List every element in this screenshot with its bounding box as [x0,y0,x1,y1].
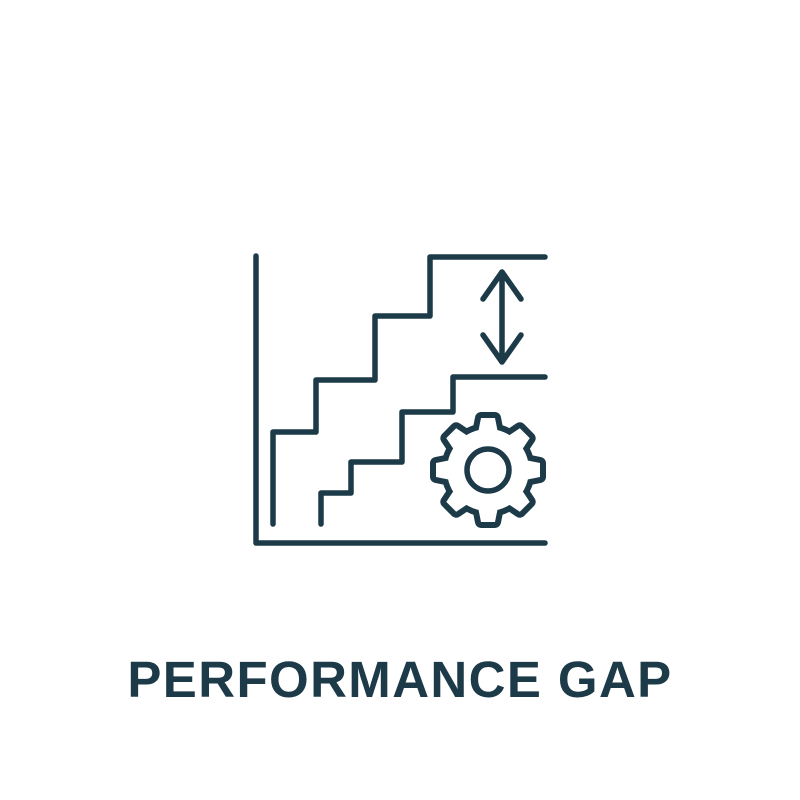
upper staircase [273,257,545,524]
axes [256,256,545,543]
icon: gear [436,418,540,522]
arrow: double-headed gap arrow [483,272,521,362]
lower staircase [321,377,545,524]
title: PERFORMANCE GAP [127,651,673,708]
icon: performance gap staircase chart [253,253,548,546]
